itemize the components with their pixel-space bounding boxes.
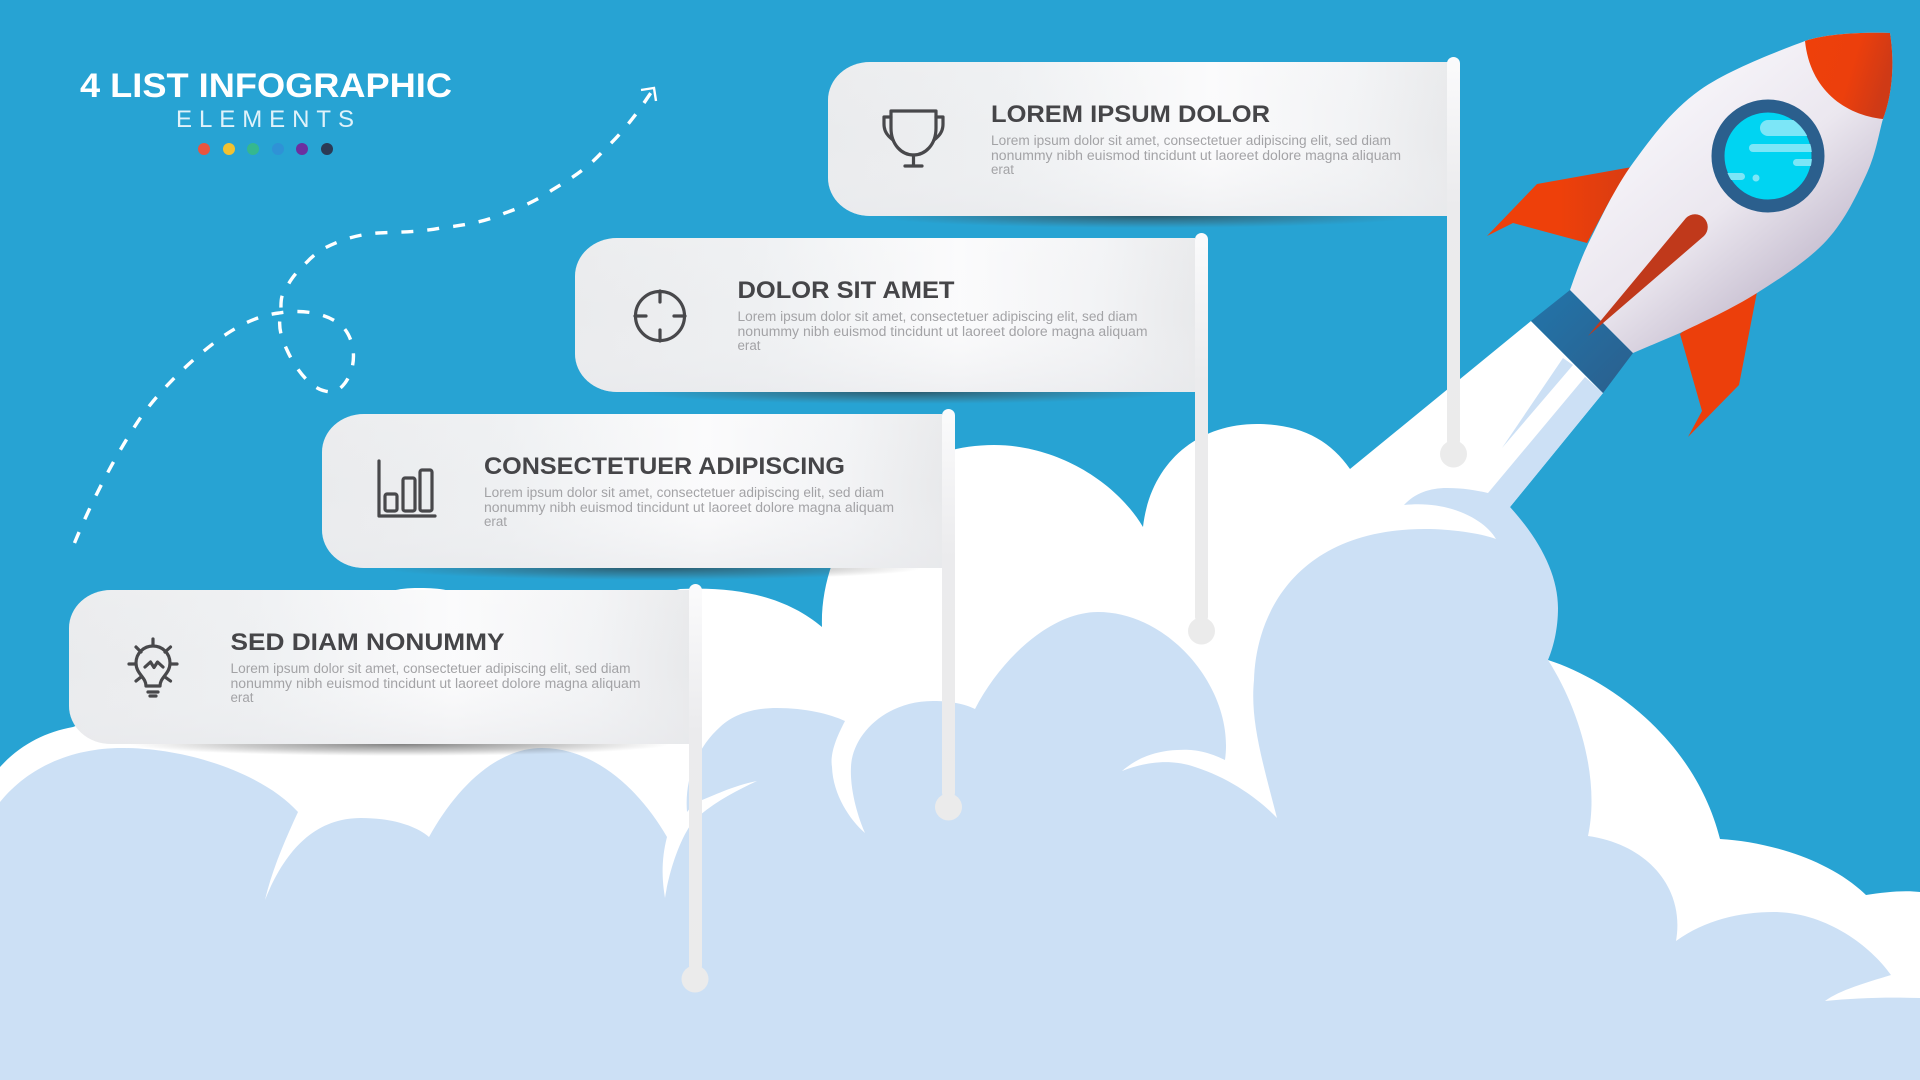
panel: lorem ipsum dolor flag — [828, 62, 1448, 228]
flagpole 2 — [1188, 233, 1215, 644]
colour dots — [198, 143, 333, 155]
body text: Lorem ipsum dolor sit amet, consectetuer adipiscing elit, sed diam — [991, 133, 1391, 148]
plume streak — [1502, 358, 1573, 448]
body text: erat — [738, 338, 761, 353]
body text: nonummy nibh euismod tincidunt ut laoreet dolore magna aliquam — [738, 324, 1148, 339]
icon: trophy — [884, 111, 943, 166]
body text: nonummy nibh euismod tincidunt ut laoreet dolore magna aliquam — [484, 500, 894, 515]
white smoke cloud and rocket plume — [0, 321, 1920, 1080]
rocket left fin — [1487, 167, 1632, 243]
rocket porthole — [1715, 106, 1823, 206]
heading: LOREM IPSUM DOLOR — [991, 101, 1270, 128]
light blue smoke cloud — [0, 377, 1920, 1080]
icon: bar chart — [379, 461, 435, 516]
icon: light bulb — [129, 639, 177, 696]
heading: DOLOR SIT AMET — [738, 277, 955, 304]
body text: Lorem ipsum dolor sit amet, consectetuer adipiscing elit, sed diam — [230, 661, 630, 676]
rocket right fin — [1680, 292, 1757, 437]
panel: dolor sit amet flag — [575, 238, 1195, 404]
body text: nonummy nibh euismod tincidunt ut laoreet dolore magna aliquam — [991, 148, 1401, 163]
panel: sed diam nonummy flag — [69, 590, 689, 756]
rocket nose — [1805, 33, 1892, 119]
body text: nonummy nibh euismod tincidunt ut laoreet dolore magna aliquam — [230, 676, 640, 691]
body text — [230, 661, 640, 705]
rocket body — [1570, 33, 1892, 353]
icon: target — [635, 291, 685, 341]
title — [80, 67, 452, 155]
body text — [738, 309, 1148, 353]
heading: SED DIAM NONUMMY — [230, 629, 504, 656]
title main line: 4 LIST INFOGRAPHIC — [80, 67, 452, 105]
body text — [991, 133, 1401, 177]
rocket collar — [1531, 290, 1633, 393]
body text: Lorem ipsum dolor sit amet, consectetuer adipiscing elit, sed diam — [738, 309, 1138, 324]
flagpole 1 — [1440, 57, 1467, 468]
body text: erat — [230, 690, 254, 705]
heading: CONSECTETUER ADIPISCING — [484, 453, 845, 480]
body text: erat — [484, 514, 507, 529]
body text — [484, 485, 894, 529]
body text: Lorem ipsum dolor sit amet, consectetuer adipiscing elit, sed diam — [484, 485, 884, 500]
rocket red stripe — [1588, 214, 1708, 336]
flagpole 3 — [935, 409, 962, 820]
dashed flight path — [74, 88, 656, 543]
flagpole 4 — [682, 584, 708, 992]
rocket — [1487, 33, 1892, 437]
title subline: ELEMENTS — [176, 106, 354, 133]
panel: consectetuer adipiscing flag — [322, 414, 942, 580]
body text: erat — [991, 162, 1014, 177]
